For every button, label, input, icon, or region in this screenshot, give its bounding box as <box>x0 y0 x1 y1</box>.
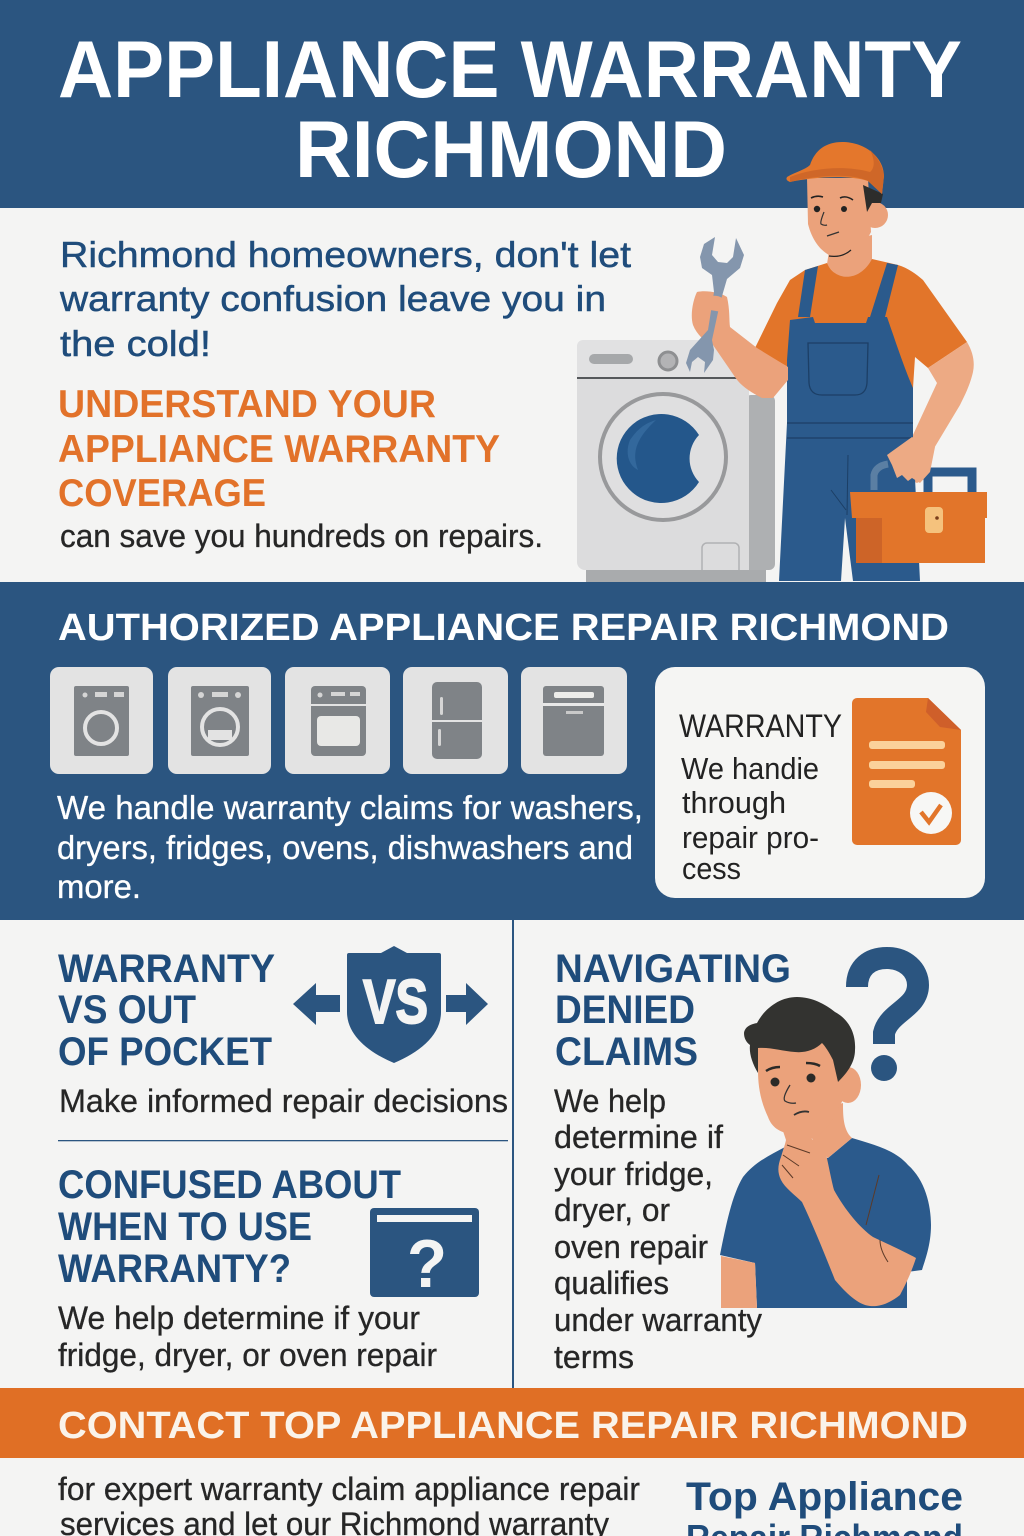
icon: dryer tile <box>168 667 271 774</box>
icon: technician with wrench and toolbox <box>686 142 987 581</box>
heading: understand coverage <box>58 383 500 515</box>
title: APPLIANCE WARRANTY <box>58 25 962 115</box>
text block: denied claims help: qualifies <box>554 1265 669 1301</box>
heading: navigating denied claims: NAVIGATING <box>555 947 791 991</box>
hair <box>744 997 855 1082</box>
icon: washing machine illustration <box>577 340 775 582</box>
wrench <box>686 237 744 373</box>
panel: warranty card <box>655 667 985 898</box>
card text <box>681 751 819 886</box>
heading: navigating denied claims <box>555 947 791 1074</box>
icon: big question mark <box>857 958 918 1081</box>
heading: understand coverage: COVERAGE <box>58 472 266 515</box>
text block: informed decisions: Make informed repair decisions <box>59 1083 508 1119</box>
text block: denied claims help <box>554 1083 762 1375</box>
heading: confused about warranty <box>58 1163 401 1291</box>
icon: vs shield with arrows <box>293 946 488 1063</box>
orange t-shirt <box>755 259 967 388</box>
text block: denied claims help: oven repair <box>554 1229 708 1265</box>
panel: title banner <box>0 0 1024 208</box>
neck <box>812 1103 852 1158</box>
icon: confused man <box>720 997 931 1308</box>
contact heading: CONTACT TOP APPLIANCE REPAIR RICHMOND <box>58 1405 968 1447</box>
text block: savings: can save you hundreds on repairs. <box>60 518 543 554</box>
overalls <box>779 263 920 581</box>
heading: navigating denied claims: DENIED <box>555 988 695 1032</box>
text block: intro: the cold! <box>60 323 211 364</box>
heading: warranty vs out of pocket: OF POCKET <box>58 1030 272 1074</box>
technician neck and face <box>807 178 888 280</box>
heading: navigating denied claims: CLAIMS <box>555 1030 698 1074</box>
icon: oven tile <box>285 667 390 774</box>
hard cap <box>786 142 884 194</box>
text block: help determine: We help determine if your <box>58 1300 420 1336</box>
text block: intro: warranty confusion leave you in <box>59 278 606 319</box>
icon: washer tile <box>50 667 153 774</box>
card text: through <box>682 785 786 820</box>
hand on toolbox <box>887 437 935 483</box>
heading: understand coverage: APPLIANCE WARRANTY <box>58 428 500 471</box>
text block: denied claims help: determine if <box>554 1119 723 1155</box>
gripping fingers <box>708 296 726 312</box>
title: RICHMOND <box>295 105 727 195</box>
text block: denied claims help: your fridge, <box>554 1156 713 1192</box>
face <box>757 1040 843 1139</box>
text block: contact details <box>58 1471 640 1536</box>
text block: denied claims help: terms <box>554 1339 634 1375</box>
text block: denied claims help: We help <box>554 1083 666 1119</box>
toolbox <box>850 464 987 563</box>
card text: We handie <box>681 751 819 786</box>
title <box>58 25 962 195</box>
panel: authorized repair band <box>0 582 1024 920</box>
text block: warranty claims: more. <box>57 868 141 905</box>
right arm <box>887 342 974 483</box>
heading: authorized repair: AUTHORIZED APPLIANCE REPAIR RICHMOND <box>58 607 949 649</box>
icon: fridge tile <box>403 667 508 774</box>
text block: denied claims help: under warranty <box>554 1302 762 1338</box>
text block: warranty claims <box>57 789 643 905</box>
text block: intro <box>59 234 631 364</box>
left arm <box>721 1256 757 1308</box>
text block: denied claims help: dryer, or <box>554 1192 670 1228</box>
card heading: WARRANTY <box>679 708 842 744</box>
icon: warranty document <box>852 698 961 845</box>
heading: warranty vs out of pocket: VS OUT <box>58 988 196 1032</box>
facial features <box>766 1063 820 1115</box>
text block: help determine <box>58 1300 437 1373</box>
card text: repair pro- <box>682 820 819 855</box>
icon: question card: ? <box>407 1226 447 1302</box>
hand and forearm <box>778 1128 916 1306</box>
icon: question card <box>370 1208 479 1302</box>
panel: contact band <box>0 1388 1024 1458</box>
text block: contact details: for expert warranty claim appliance repair <box>58 1471 640 1507</box>
heading: warranty vs out of pocket <box>58 947 275 1074</box>
text block: warranty claims: We handle warranty claims for washers, <box>57 789 643 826</box>
card text: cess <box>682 851 741 886</box>
heading: warranty vs out of pocket: WARRANTY <box>58 947 275 991</box>
text block: intro: Richmond homeowners, don't let <box>60 234 631 275</box>
icon: dishwasher tile <box>521 667 627 774</box>
icon: vs shield with arrows: VS <box>363 968 428 1037</box>
heading: confused about warranty: WHEN TO USE <box>58 1205 312 1249</box>
left arm and hand <box>692 291 788 398</box>
company name: Top Appliance <box>686 1475 963 1519</box>
shirt <box>720 1138 931 1308</box>
text block: help determine: fridge, dryer, or oven repair <box>58 1337 437 1373</box>
ear <box>835 1067 861 1103</box>
heading: understand coverage: UNDERSTAND YOUR <box>58 383 436 426</box>
heading: confused about warranty: WARRANTY? <box>58 1247 291 1291</box>
text block: warranty claims: dryers, fridges, ovens, dishwashers and <box>57 829 633 866</box>
heading: confused about warranty: CONFUSED ABOUT <box>58 1163 401 1207</box>
